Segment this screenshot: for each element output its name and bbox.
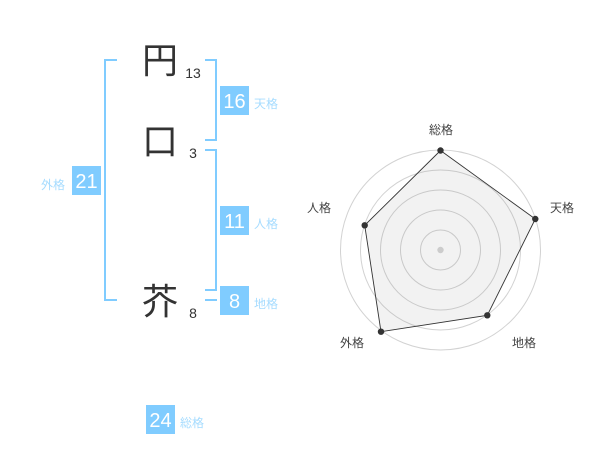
radar axis labels: 人格 [307,200,331,215]
label 人格: 人格 [254,217,278,231]
bracket tick: 地格 [205,299,217,301]
score badge 人格 11: 11 [224,211,245,233]
radar rings [340,150,540,350]
radar axis labels [307,122,574,350]
radar axis labels: 天格 [550,200,574,215]
label 天格: 天格 [254,97,278,111]
label 外格: 外格 [41,178,65,192]
score badge 人格 11 [220,206,249,235]
radar axis labels: 総格 [429,122,453,137]
score badge 地格 8 [220,286,249,315]
stroke count 13: 13 [185,65,201,81]
name character 円: 円 [142,40,178,81]
score badge 天格 16 [220,86,249,115]
stroke count 8: 8 [189,305,197,321]
radar center point [437,247,444,253]
score badge 外格 21 [72,166,101,195]
name character 芥: 芥 [142,281,178,322]
bracket: outer frame 外格 [104,59,117,301]
radar data points [362,147,538,335]
score badge 外格 21: 21 [75,171,98,193]
stroke count 3: 3 [189,145,197,161]
score badge 総格 24: 24 [149,410,172,432]
score badge 総格 24 [146,405,175,434]
label 地格: 地格 [254,297,278,311]
score badge 地格 8: 8 [229,291,240,313]
name character 口: 口 [142,121,178,162]
radar axis labels: 地格 [512,335,536,350]
bracket: 天格 [205,59,217,141]
radar axis labels: 外格 [340,335,364,350]
radar data polygon [365,150,535,332]
score badge 天格 16: 16 [223,91,246,113]
label 総格: 総格 [180,416,204,430]
bracket: 人格 [205,149,217,291]
